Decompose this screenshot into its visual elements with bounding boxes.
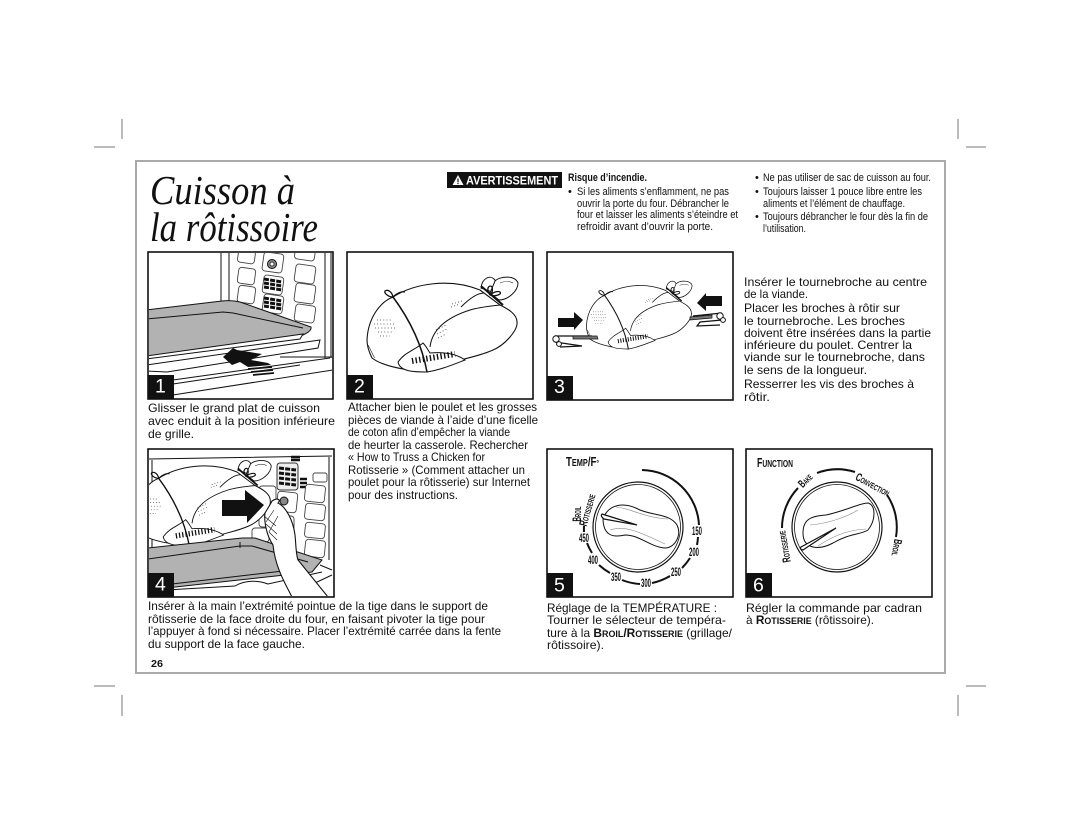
arrow right (222, 490, 264, 523)
instructions for step 3: Insérer le tournebroche au centre (744, 275, 927, 289)
title: Cuisson à (150, 167, 295, 213)
caption 6: à ROTISSERIE (rôtissoire). (746, 613, 874, 627)
caption 2: poulet pour la rôtisserie) sur Internet (348, 475, 531, 489)
warning text: other bullets: l’utilisation. (763, 223, 806, 235)
caption 5: rôtissoire). (547, 638, 604, 652)
warning text: fire risk: Risque d’incendie. (568, 172, 647, 184)
temperature scale arcs (584, 470, 699, 584)
temperature scale labels: 150 (692, 526, 702, 538)
warning text: fire risk: four et laisser les aliments s’éteindre et (577, 209, 738, 221)
function scale labels: BAKE (796, 471, 816, 490)
page frame (136, 161, 945, 673)
caption 4: l’appuyer à fond si nécessaire. Placer l’extrémité carrée dans la fente (148, 624, 501, 638)
dial knob (800, 503, 874, 550)
dial ring (593, 482, 683, 572)
step number 6 (746, 573, 772, 597)
temperature scale labels: 250 (671, 567, 681, 579)
spit fork right (690, 313, 725, 326)
baking tray (148, 538, 332, 591)
caption 1: avec enduit à la position inférieure (148, 414, 335, 428)
instructions for step 3 (744, 275, 931, 404)
title: la rôtissoire (150, 204, 318, 250)
caption 6: Régler la commande par cadran (746, 601, 922, 615)
panel 2: trussed chicken (347, 252, 533, 399)
chicken on spit (135, 460, 271, 546)
caption 2 (348, 400, 538, 502)
function scale labels: ROTISSERIE (776, 529, 794, 563)
warning text: fire risk: Si les aliments s’enflamment, ne pas (577, 186, 729, 198)
caption 1: Glisser le grand plat de cuisson (148, 401, 320, 415)
caption 1: de grille. (148, 427, 194, 441)
title (150, 167, 318, 250)
panel 5: temperature dial (547, 449, 733, 597)
temperature scale labels (572, 492, 702, 590)
step number 5 (547, 573, 573, 597)
temperature scale labels: 400 (588, 555, 598, 567)
warning text: fire risk: ouvrir la porte du four. Débrancher le (577, 198, 729, 210)
warning text: fire risk (568, 172, 738, 233)
panel 4: inserting spit in oven (135, 449, 334, 597)
temperature scale labels: 350 (611, 572, 621, 584)
warning text: other bullets: aliments et l’élément de chauffage. (763, 198, 905, 210)
caption 5: Tourner le sélecteur de tempéra- (547, 613, 726, 627)
step number 3: 3 (554, 376, 565, 398)
caption 2: de coton afin d’empêcher la viande (348, 425, 510, 439)
dial ring (792, 482, 882, 572)
function scale labels: CONVECTION (853, 471, 892, 499)
caption 4: du support de la face gauche. (148, 637, 305, 651)
step number 4: 4 (155, 574, 166, 596)
temperature scale labels: BROIL (572, 506, 584, 522)
warning text: other bullets: Toujours laisser 1 pouce libre entre les (763, 186, 922, 198)
step number 1: 1 (155, 376, 166, 398)
step number 6: 6 (753, 574, 764, 596)
caption 1 (148, 401, 335, 441)
instructions for step 3: de la viande. (744, 287, 808, 301)
warning text: other bullets (755, 172, 931, 235)
instructions for step 3: doivent être insérées dans la partie (744, 326, 931, 340)
temperature scale labels: 450 (579, 533, 589, 545)
caption 5 (547, 600, 733, 652)
caption 2: Attacher bien le poulet et les grosses (348, 400, 537, 414)
arrow left (697, 293, 722, 311)
instructions for step 3: viande sur le tournebroche, dans (744, 350, 925, 364)
warning text: other bullets: • (755, 186, 759, 198)
step number 3 (547, 376, 573, 400)
oven controls (252, 457, 327, 558)
dial knob (601, 505, 679, 548)
temperature scale labels: 200 (689, 547, 699, 559)
baking tray (146, 301, 311, 359)
panel 1: tray in oven (146, 245, 333, 399)
arrow: push tray in (223, 348, 274, 375)
function scale labels: BROIL (889, 538, 903, 557)
oven rack (146, 340, 333, 395)
warning text: other bullets: Toujours débrancher le four dès la fin de (763, 211, 928, 223)
dial label: TEMP/F° (566, 454, 599, 469)
page number: 26 (151, 658, 163, 670)
temperature scale labels: 300 (641, 578, 651, 590)
function scale labels (776, 471, 903, 563)
caption 5: Réglage de la TEMPÉRATURE : (547, 600, 717, 615)
dial label: FUNCTION (757, 455, 793, 470)
hand (265, 499, 328, 597)
caption 4: rôtisserie de la face droite du four, en faisant pivoter la tige pour (148, 612, 485, 626)
panel 6: function dial (746, 449, 932, 597)
warning text: other bullets: Ne pas utiliser de sac de cuisson au four. (763, 172, 931, 184)
warning text: other bullets: • (755, 211, 759, 223)
warning badge: AVERTISSEMENT (466, 174, 559, 188)
instructions for step 3: rôtir. (744, 390, 770, 404)
caption 2: de heurter la casserole. Rechercher (348, 438, 528, 452)
warning text: fire risk: refroidir avant d’ouvrir la porte. (577, 221, 713, 233)
instructions for step 3: Resserrer les vis des broches à (744, 377, 914, 391)
step number 2 (347, 375, 373, 399)
step number 5: 5 (554, 574, 565, 596)
instructions for step 3: le tournebroche. Les broches (744, 314, 905, 328)
caption 2: pour des instructions. (348, 488, 458, 502)
spit fork left (553, 336, 598, 347)
instructions for step 3: le sens de la longueur. (744, 363, 867, 377)
caption 4 (148, 599, 501, 651)
instructions for step 3: inférieure du poulet. Centrer la (744, 338, 912, 352)
caption 2: Rotisserie » (Comment attacher un (348, 463, 525, 477)
crop marks (94, 119, 986, 716)
caption 2: « How to Truss a Chicken for (348, 450, 485, 464)
instructions for step 3: Placer les broches à rôtir sur (744, 301, 900, 315)
warning text: other bullets: • (755, 172, 759, 184)
step number 1 (148, 375, 174, 399)
step number 2: 2 (354, 376, 365, 398)
caption 4: Insérer à la main l’extrémité pointue de la tige dans le support de (148, 599, 488, 613)
function scale arcs (782, 469, 897, 537)
panel 3: chicken with spit forks (547, 252, 733, 400)
warning text: fire risk: • (568, 186, 572, 198)
caption 6 (746, 601, 922, 627)
caption 2: pièces de viande à l’aide d’une ficelle (348, 413, 538, 427)
arrow right (558, 312, 583, 330)
temperature scale labels: ROTISSERIE (578, 492, 599, 528)
caption 5: ture à la BROIL/ROTISSERIE (grillage/ (547, 626, 733, 640)
step number 4 (148, 573, 174, 597)
